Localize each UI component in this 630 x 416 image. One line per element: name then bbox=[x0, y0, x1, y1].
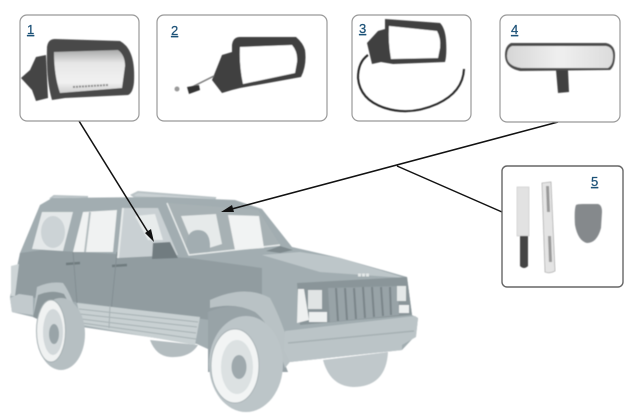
left headlight bbox=[308, 290, 322, 309]
car illustration bbox=[10, 192, 418, 412]
hood highlight bbox=[262, 252, 405, 278]
front fascia bbox=[297, 277, 412, 325]
roof rack bbox=[50, 192, 215, 201]
rear bumper bbox=[10, 294, 33, 315]
connector line to panel 5 bbox=[397, 166, 502, 212]
front rim bbox=[211, 329, 259, 403]
mirror 2 image bbox=[174, 37, 306, 94]
mirror 4 image bbox=[505, 43, 615, 93]
lower body shade bbox=[14, 250, 262, 320]
left lower lamp bbox=[309, 312, 327, 322]
rocker lines bbox=[79, 306, 198, 339]
right mirror on windshield bbox=[266, 246, 293, 253]
rear rim inner bbox=[43, 309, 63, 355]
window frame bbox=[118, 208, 123, 258]
rear wheel arch bbox=[33, 282, 80, 324]
panel 2: outside mirror with cable adjuster bbox=[157, 15, 327, 121]
door handles bbox=[66, 263, 127, 266]
door seam bbox=[73, 252, 117, 322]
rocker panel bbox=[77, 303, 200, 345]
number 2: 2 bbox=[171, 23, 178, 38]
panel 5: adhesive kit bbox=[502, 166, 623, 287]
bumper bbox=[284, 316, 418, 362]
corner light bbox=[297, 289, 309, 323]
front wheel arch bbox=[210, 291, 293, 368]
underbody bbox=[150, 340, 198, 357]
front seat bbox=[186, 230, 210, 253]
rear wheel well bbox=[33, 292, 82, 327]
bumper crease bbox=[288, 331, 414, 343]
badge bbox=[358, 274, 370, 276]
mirror 3 image bbox=[358, 19, 464, 111]
side mirror on car bbox=[152, 242, 178, 259]
grille slats bbox=[336, 287, 391, 321]
front wheel well bbox=[208, 307, 288, 372]
mirror mounting button bbox=[575, 204, 602, 243]
panel 1: outside mirror bbox=[20, 15, 139, 121]
panel 4: rearview mirror bbox=[500, 15, 620, 122]
front hub bbox=[232, 355, 246, 379]
rear door window bbox=[73, 210, 117, 252]
body bbox=[10, 197, 418, 364]
number 4: 4 bbox=[511, 22, 518, 37]
grille bbox=[328, 286, 399, 322]
windshield bbox=[167, 203, 280, 255]
windshield glass left bbox=[181, 214, 222, 252]
spare tire in window bbox=[41, 216, 65, 248]
rear hub bbox=[49, 324, 59, 344]
arrow: mirror 4 to windshield bbox=[221, 122, 558, 212]
rear wheel bbox=[36, 298, 85, 370]
right headlight bbox=[397, 286, 406, 301]
number 5: 5 bbox=[591, 174, 598, 189]
front window light area bbox=[135, 214, 163, 240]
windshield glass right bbox=[228, 215, 264, 250]
panel 3: power mirror with wire bbox=[352, 15, 471, 121]
rear door window pillar bbox=[85, 212, 90, 252]
arrow: mirror 1 to car bbox=[79, 121, 154, 242]
number 3: 3 bbox=[359, 21, 366, 36]
windshield frame bbox=[167, 203, 280, 255]
number 1: 1 bbox=[27, 22, 34, 37]
rear tire bbox=[37, 298, 85, 370]
front door window bbox=[118, 208, 178, 258]
far side wheel bbox=[323, 352, 388, 387]
front tire bbox=[209, 316, 283, 412]
adhesive tube bbox=[517, 187, 529, 268]
adhesive marker bbox=[542, 182, 555, 273]
rear rim bbox=[36, 300, 66, 362]
front rim inner bbox=[221, 340, 253, 394]
rear tail light bbox=[11, 264, 19, 296]
right lower lamp bbox=[399, 305, 409, 313]
rear cargo window bbox=[32, 212, 73, 251]
front wheel bbox=[209, 316, 283, 412]
mirror 1 image bbox=[21, 39, 134, 101]
